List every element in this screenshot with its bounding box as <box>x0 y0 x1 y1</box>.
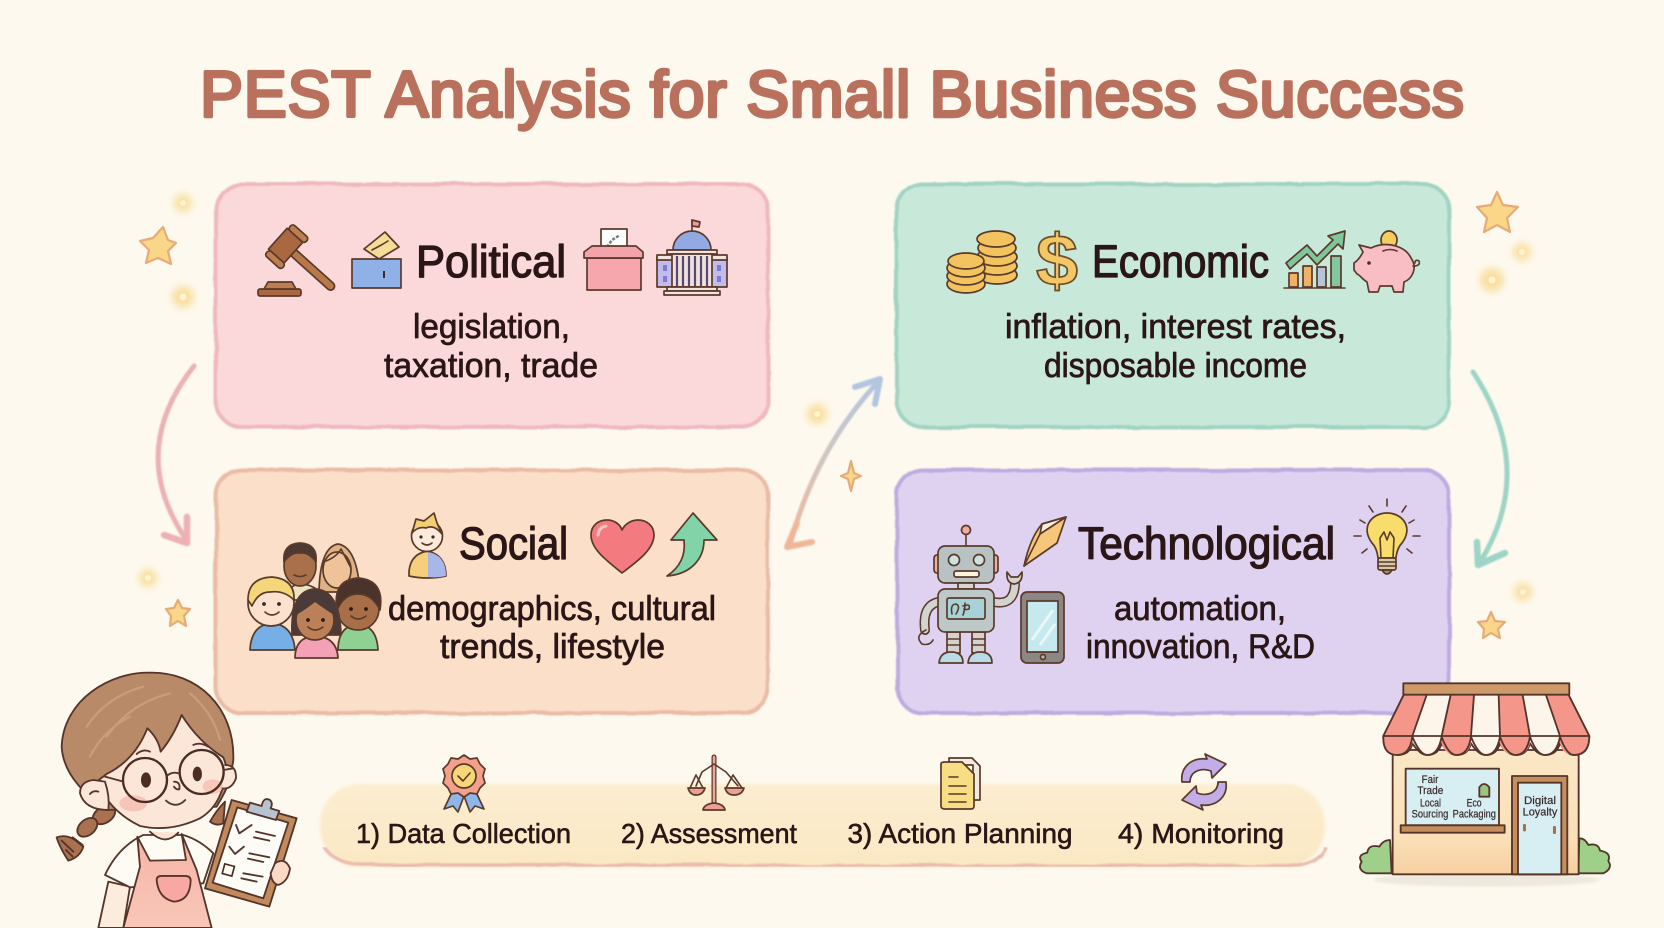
icon: dollar sign: $ <box>1036 221 1078 301</box>
icon: light bulb <box>1354 499 1420 574</box>
body: political factors: legislation, <box>413 308 570 346</box>
icon: ballot card and blue box <box>352 232 401 288</box>
hand <box>271 861 290 885</box>
body: political factors: taxation, trade <box>384 347 598 385</box>
panel: technological <box>897 470 1449 713</box>
icon: piggy bank <box>1354 231 1419 292</box>
title: PEST Analysis for Small Business Success <box>200 58 1464 130</box>
decorative stars and sparkles <box>139 192 1532 638</box>
label: Technological: Technological <box>1078 518 1335 569</box>
shop window with signs: Eco <box>1467 798 1482 810</box>
braids <box>57 802 225 861</box>
body: social factors: trends, lifestyle <box>440 628 665 666</box>
arrow: social and economic double-headed <box>787 379 880 547</box>
icon: refresh cycle <box>1182 754 1226 810</box>
icon: document <box>941 758 980 809</box>
body: technological factors <box>1086 590 1315 666</box>
label: Social: Social <box>459 518 568 569</box>
body: economic factors: inflation, interest rates, <box>1005 308 1346 346</box>
panel: social <box>216 470 768 713</box>
icon: green up arrow <box>667 513 717 576</box>
shop window with signs: Trade <box>1417 785 1443 797</box>
icon: kite feather <box>1024 517 1066 566</box>
body and apron <box>98 832 213 928</box>
label: Economic: Economic <box>1092 236 1269 287</box>
icon: smartphone <box>1021 592 1064 663</box>
step 4: monitoring: 4) Monitoring <box>1118 818 1284 849</box>
character: girl with clipboard <box>57 673 297 928</box>
icon: coin stacks <box>947 231 1017 293</box>
body: technological factors: automation, <box>1114 590 1286 628</box>
process banner <box>320 754 1325 867</box>
head <box>62 673 236 828</box>
glasses and face <box>105 744 233 805</box>
body: economic factors <box>1005 308 1346 385</box>
body: social factors: demographics, cultural <box>388 590 716 628</box>
icon: person <box>409 513 446 578</box>
arrow: economic to technological <box>1473 372 1507 565</box>
bushes <box>1360 838 1610 873</box>
body: political factors <box>384 308 598 385</box>
icon: robot <box>919 526 1022 663</box>
clipboard <box>205 799 297 907</box>
arrow: political to social <box>158 366 194 543</box>
body: technological factors: innovation, R&D <box>1086 628 1315 666</box>
ground shadow <box>1373 873 1600 887</box>
step 3: action planning: 3) Action Planning <box>848 818 1072 849</box>
shop wall <box>1393 750 1579 874</box>
step 1: data collection <box>356 755 571 849</box>
panel: political <box>216 184 768 427</box>
door <box>1512 776 1567 874</box>
panel: economic <box>897 184 1449 427</box>
step 3: action planning <box>848 758 1072 849</box>
icon: government building <box>657 220 727 295</box>
shop window with signs <box>1401 769 1505 833</box>
awning <box>1383 683 1589 755</box>
step 2: assessment: 2) Assessment <box>621 818 797 849</box>
body: social factors <box>388 590 716 666</box>
icon: award rosette <box>443 755 485 812</box>
icon: heart <box>591 520 654 573</box>
step 4: monitoring <box>1118 754 1284 849</box>
shop window with signs: Sourcing <box>1412 808 1448 820</box>
shop window with signs: Fair <box>1422 774 1439 786</box>
door: Loyalty <box>1523 806 1558 818</box>
icon: pink ballot box <box>584 229 643 290</box>
icon: balance scale <box>688 757 744 810</box>
icon: growth chart <box>1284 231 1345 288</box>
icon: diverse group of people <box>248 543 381 658</box>
shop window with signs: Packaging <box>1453 808 1496 820</box>
body: economic factors: disposable income <box>1044 347 1307 385</box>
storefront <box>1360 683 1610 887</box>
icon: gavel <box>258 223 348 304</box>
step 2: assessment <box>621 757 797 849</box>
step 1: data collection: 1) Data Collection <box>356 818 571 849</box>
shop window with signs: Local <box>1420 798 1441 810</box>
door: Digital <box>1524 795 1556 807</box>
label: Political: Political <box>416 236 566 287</box>
